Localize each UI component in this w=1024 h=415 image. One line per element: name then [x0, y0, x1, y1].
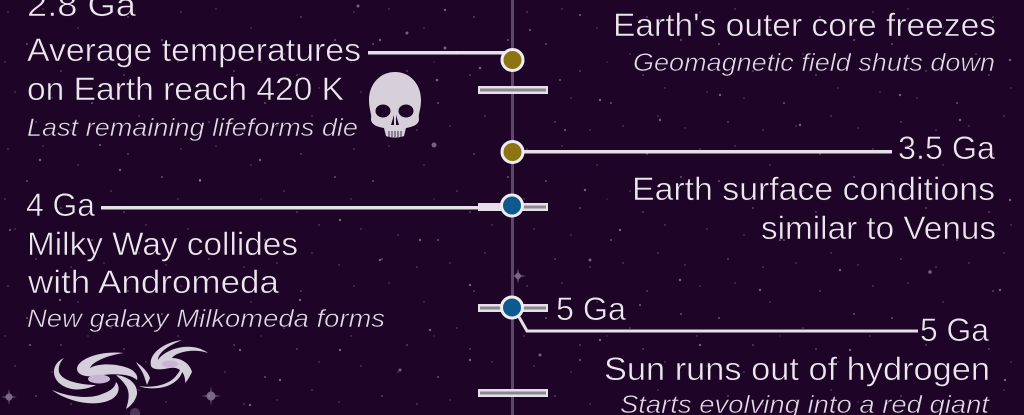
tick mark: 3 Ga [478, 86, 548, 94]
timeline axis [511, 0, 514, 415]
event: 4 Ga Milky Way collision: 4 Ga [26, 187, 96, 223]
event: 4 Ga Milky Way collision: New galaxy Milkomeda forms [27, 305, 385, 333]
tick mark: 5 Ga [478, 304, 548, 312]
icon: skull [369, 72, 421, 138]
event: Sun runs out of hydrogen: 5 Ga [920, 312, 990, 348]
event: outer core freezes [613, 7, 996, 77]
tick mark: 6 Ga [478, 389, 548, 397]
event: Sun runs out of hydrogen [519, 312, 990, 415]
event: 5 Ga marker [502, 291, 627, 327]
event: outer core freezes: Geomagnetic field shuts down [633, 49, 995, 77]
event: 3.5 Ga Venus: 3.5 Ga [898, 130, 996, 166]
event: 4 Ga Milky Way collision: with Andromeda [27, 264, 280, 300]
event: 2.8 Ga temperatures: Average temperatures [27, 32, 361, 68]
event: 4 Ga Milky Way collision [26, 187, 522, 333]
event: 3.5 Ga Venus: Earth surface conditions [632, 171, 995, 207]
event: outer core freezes: Earth's outer core freezes [613, 7, 996, 43]
event: 5 Ga marker: 5 Ga [556, 291, 627, 327]
event: 4 Ga Milky Way collision: Milky Way collides [27, 226, 298, 262]
event: Sun runs out of hydrogen: Sun runs out of hydrogen [604, 351, 990, 387]
event: 2.8 Ga temperatures: on Earth reach 420 K [27, 71, 344, 107]
event: 3.5 Ga Venus [502, 130, 996, 246]
event: 3.5 Ga Venus: similar to Venus [761, 210, 996, 246]
event: 2.8 Ga temperatures [27, 0, 523, 142]
event: 2.8 Ga temperatures: Last remaining lifeforms die [27, 114, 358, 142]
icon: colliding galaxies [52, 340, 208, 409]
tick mark: 4 Ga [478, 203, 548, 211]
